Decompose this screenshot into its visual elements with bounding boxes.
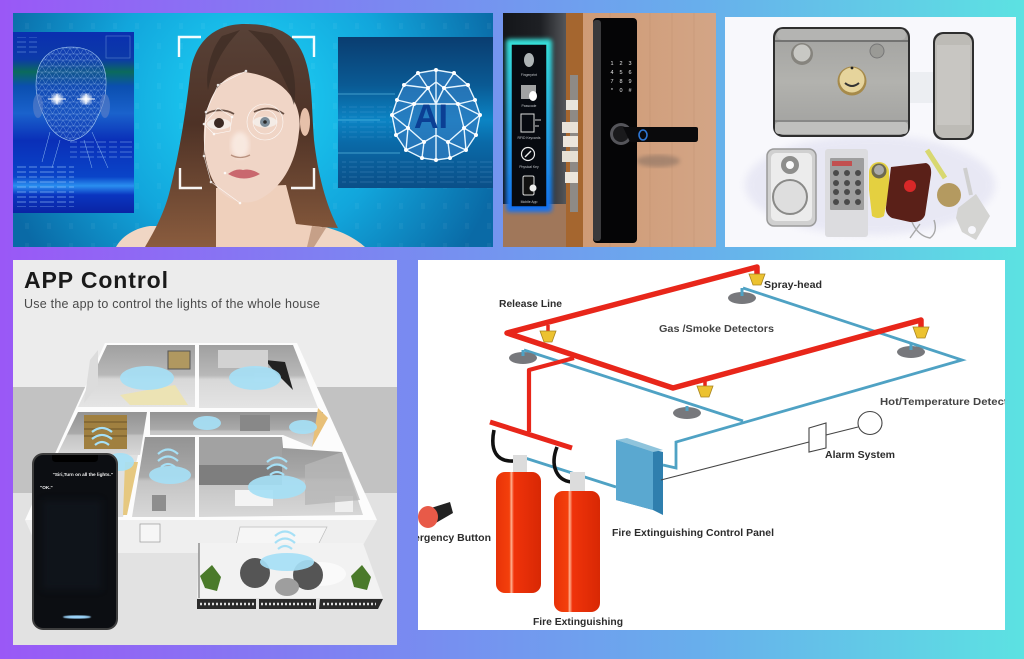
- rooms: [57, 345, 363, 517]
- door bolt plate: [562, 75, 578, 212]
- scan corner brackets: [179, 37, 314, 188]
- strip captions: Mobile App: [521, 200, 537, 204]
- black lock body: [593, 18, 698, 243]
- diagram labels: Emergency Button: [398, 532, 491, 544]
- woman portrait: [116, 24, 365, 247]
- panel: fire suppression diagram: [398, 260, 1019, 630]
- nose highlight: [231, 132, 249, 158]
- lips: [228, 170, 260, 178]
- keypad digits: 8: [619, 79, 623, 85]
- red release line: [490, 267, 921, 448]
- diagram labels: Fire Extinguishing Control Panel: [612, 527, 774, 539]
- strip captions: RFID Keycards: [518, 136, 541, 140]
- panel: smart door lock: [503, 13, 716, 247]
- lock bolt: [909, 72, 933, 103]
- wifi arcs: [92, 428, 295, 549]
- smoke detectors: [509, 288, 925, 419]
- eyes and brows: [206, 108, 284, 130]
- keypad digits: 9: [628, 79, 632, 85]
- brass cylinder and keys: [927, 150, 990, 240]
- strip captions: [518, 73, 541, 204]
- gas cylinders: [496, 455, 600, 612]
- keypad digits: 3: [628, 61, 632, 67]
- lock body: [773, 27, 910, 137]
- alarm wiring: [661, 412, 882, 480]
- neon unlock methods strip: [506, 39, 552, 212]
- face tracking mesh: [203, 70, 283, 204]
- left wireframe head screen: [13, 32, 134, 213]
- keypad digits: #: [628, 88, 632, 94]
- panel: electronic rim lock kit: [725, 17, 1016, 247]
- balcony: [197, 543, 383, 609]
- light pools: [106, 366, 317, 571]
- keypad digits: 2: [619, 61, 623, 67]
- furniture: [84, 350, 360, 515]
- diagram labels: [398, 279, 1019, 628]
- keypad digits: 0: [619, 88, 623, 94]
- glowing eyes: [48, 94, 95, 104]
- diagram labels: Hot/Temperature Detector: [880, 396, 1019, 408]
- title: APP Control: [24, 267, 168, 293]
- black hoses: [493, 430, 571, 482]
- right AI brain screen: [338, 37, 493, 188]
- cover plate: [767, 149, 816, 226]
- red key fob: [886, 163, 935, 238]
- strip captions: Fingerprint: [521, 73, 537, 77]
- panel: app-controlled house: [13, 260, 397, 645]
- control panel: [616, 438, 663, 515]
- voice command: "Siri,Turn on all the lights.": [53, 472, 113, 477]
- strip captions: Physical Key: [519, 165, 539, 169]
- diagram labels: Alarm System: [825, 449, 895, 461]
- emergency button: [418, 502, 453, 528]
- keypad remote: [825, 149, 868, 237]
- diagram labels: Release Line: [499, 298, 562, 310]
- floor plan model: [25, 343, 383, 609]
- strike box: [933, 32, 974, 140]
- front wall and windows: [140, 524, 327, 545]
- panel: facial recognition: [13, 13, 493, 247]
- blue detector wiring: [524, 288, 962, 487]
- keypad digits: 6: [628, 70, 632, 76]
- strip captions: Passcode: [522, 104, 537, 108]
- voice reply: "OK.": [40, 485, 53, 490]
- keypad digits: 1: [610, 61, 614, 67]
- diagram labels: Fire Extinguishing: [533, 616, 623, 628]
- spray heads: [540, 274, 929, 397]
- diagram labels: Gas /Smoke Detectors: [659, 323, 774, 335]
- yellow key tag: [869, 162, 889, 218]
- keypad digits: *: [611, 88, 614, 94]
- keypad digits: 7: [610, 79, 614, 85]
- keypad digits: [610, 61, 632, 94]
- subtitle: Use the app to control the lights of the whole house: [24, 297, 320, 311]
- AI lettering: AI: [414, 98, 448, 136]
- keypad digits: 5: [619, 70, 623, 76]
- smartphone: [32, 453, 118, 630]
- lever handle: [610, 123, 698, 145]
- handle shadow: [636, 155, 680, 167]
- keypad digits: 4: [610, 70, 614, 76]
- diagram labels: Spray-head: [764, 279, 822, 291]
- brain network: [390, 68, 482, 162]
